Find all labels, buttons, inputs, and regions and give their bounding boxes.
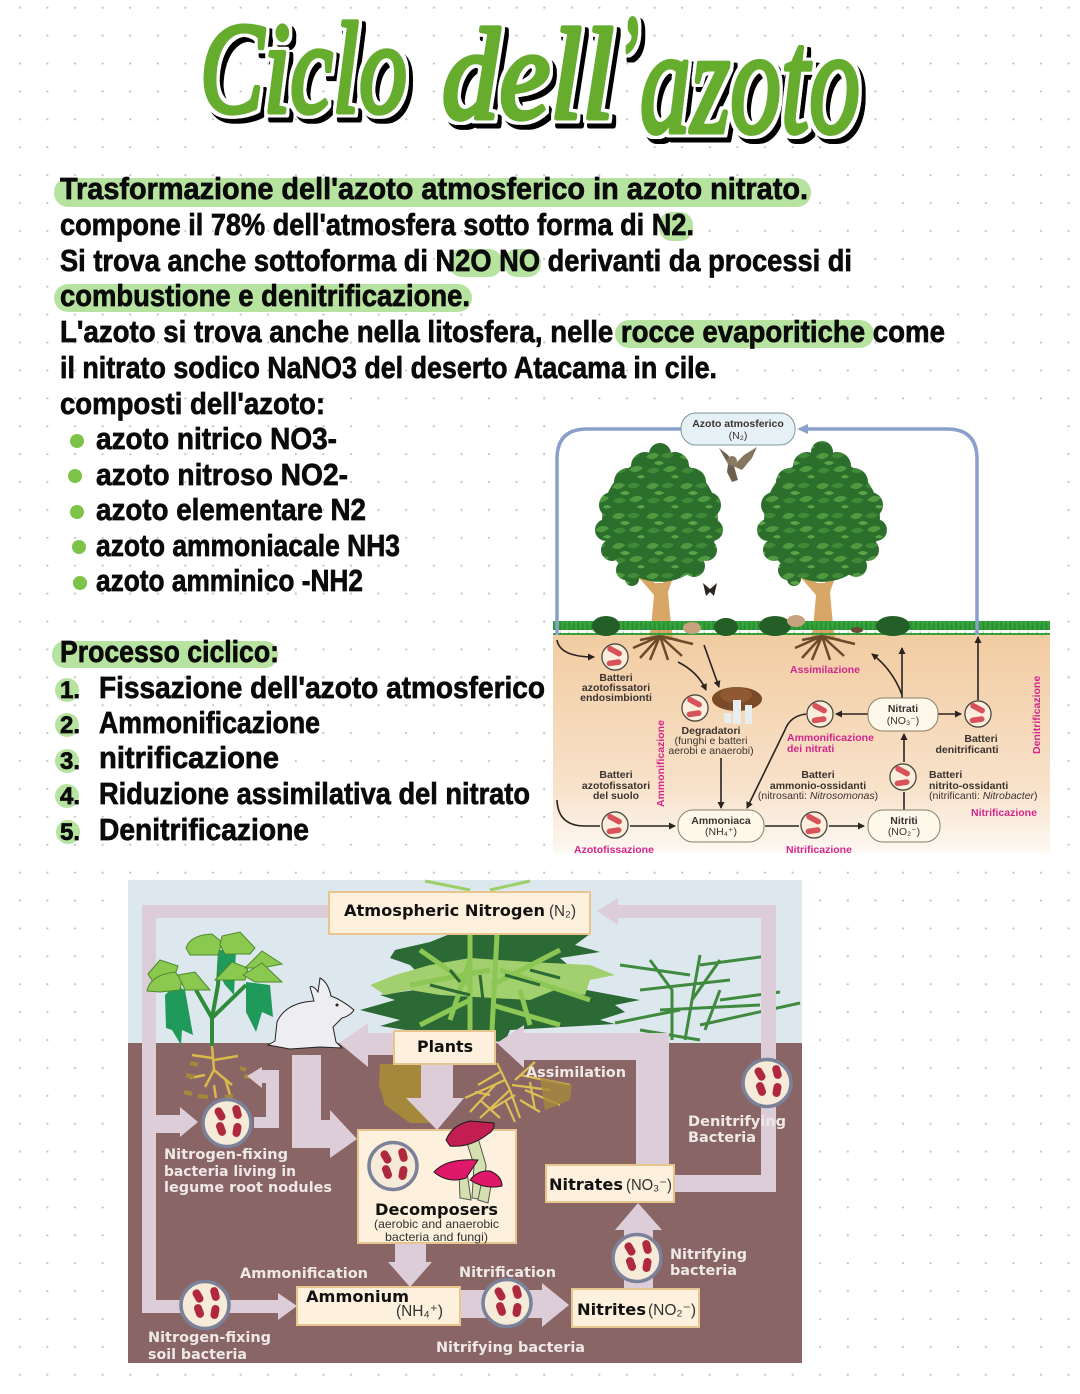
labels: aerobi e anaerobi) [668, 745, 754, 757]
butterfly [703, 583, 717, 596]
labels: Ammonificazione [655, 720, 667, 807]
labels: del suolo [593, 790, 639, 802]
box: atmospheric nitrogen [329, 892, 590, 934]
box: nitriti [868, 810, 940, 842]
labels: Azotofissazione [574, 844, 654, 856]
labels: dei nitrati [787, 743, 834, 755]
process labels: Nitrogen-fixing [148, 1330, 271, 1346]
cyclic process list: 3. [60, 748, 80, 775]
box: ammonium [297, 1287, 460, 1325]
title [200, 0, 860, 165]
cyclic process list: Ammonificazione [99, 705, 320, 740]
intro text block [54, 171, 945, 421]
box: nitrates [546, 1165, 674, 1202]
labels: azotofissatori [582, 780, 650, 792]
cyclic process list: 1. [60, 677, 80, 704]
cyclic process list: Denitrificazione [99, 812, 309, 847]
labels: (nitrificanti: Nitrobacter) [929, 790, 1038, 802]
flow arrows [142, 898, 776, 1327]
compounds bullet list [68, 421, 400, 598]
box: nitrati [868, 698, 938, 731]
labels: Batteri [599, 672, 633, 684]
labels: ammonio-ossidanti [770, 780, 866, 792]
box: atmospheric nitrogen: (N₂) [729, 430, 747, 442]
icon: mushrooms [434, 1121, 502, 1203]
rabbit [268, 978, 354, 1049]
box: ammoniaca: (NH₄⁺) [705, 826, 737, 838]
box: plants: Plants [417, 1037, 473, 1056]
title: azoto [640, 0, 860, 165]
box: decomposers [358, 1121, 516, 1244]
labels [574, 664, 1043, 856]
owl [719, 447, 757, 482]
box: decomposers: Decomposers [375, 1200, 498, 1219]
right plant [615, 955, 800, 1040]
bacteria circles [602, 644, 991, 838]
process labels: Nitrifying [670, 1247, 747, 1263]
legume plant [147, 932, 282, 1046]
cyclic process list: 2. [60, 712, 80, 739]
definition line 4: combustione e denitrificazione. [60, 278, 470, 313]
process labels [148, 1065, 786, 1363]
soil [128, 1043, 802, 1363]
definition line 2: compone il 78% dell'atmosfera sotto forma di N2. [60, 207, 694, 242]
labels: Ammonificazione [787, 732, 874, 744]
labels: azotofissatori [582, 682, 650, 694]
definition line 6: il nitrato sodico NaNO3 del deserto Atacama in cile. [60, 350, 717, 385]
process labels: Nitrification [459, 1265, 556, 1281]
labels: Denitrificazione [1031, 676, 1043, 754]
cyclic process list: nitrificazione [99, 740, 279, 775]
process labels: legume root nodules [164, 1180, 332, 1196]
labels: nitrito-ossidanti [929, 780, 1008, 792]
labels: Batteri [599, 769, 633, 781]
cyclic process list: Processo ciclico: [60, 634, 279, 669]
compounds bullet list: azoto amminico -NH2 [96, 563, 363, 598]
mushrooms [712, 687, 762, 724]
box: nitrati: (NO₃⁻) [887, 715, 919, 727]
compounds bullet list: azoto ammoniacale NH3 [96, 528, 400, 563]
definition line 5: L'azoto si trova anche nella litosfera, nelle rocce evaporitiche come [60, 314, 945, 349]
box: decomposers: (aerobic and anaerobic [374, 1217, 499, 1231]
box: nitrati: Nitrati [888, 703, 918, 715]
labels: Degradatori [682, 725, 741, 737]
tree right [757, 441, 887, 660]
box: atmospheric nitrogen: (N₂) [549, 903, 576, 920]
labels: Assimilazione [790, 664, 860, 676]
definition line 1: Trasformazione dell'azoto atmosferico in azoto nitrato. [60, 171, 808, 206]
process labels: Ammonification [240, 1266, 368, 1282]
title: Ciclo [200, 0, 407, 141]
labels: Batteri [929, 769, 962, 781]
labels: Batteri [964, 733, 998, 745]
box: nitrates: (NO₃⁻) [626, 1177, 672, 1194]
tree left [595, 443, 723, 660]
process labels: Nitrifying bacteria [436, 1340, 585, 1356]
box: atmospheric nitrogen [681, 413, 795, 445]
labels: (nitrosanti: Nitrosomonas) [758, 790, 878, 802]
labels: denitrificanti [935, 744, 999, 756]
cyclic process list [52, 634, 545, 847]
box: nitriti: (NO₂⁻) [888, 826, 920, 838]
box: ammonium: Ammonium [306, 1287, 409, 1306]
process labels: Denitrifying [688, 1114, 786, 1130]
compounds bullet list: azoto nitroso NO2- [96, 457, 348, 492]
bacteria circles [181, 1060, 791, 1328]
compounds bullet list: azoto elementare N2 [96, 492, 366, 527]
title: dell [442, 3, 614, 147]
process labels: Assimilation [526, 1065, 626, 1081]
cyclic process list: 4. [60, 783, 80, 810]
box: ammoniaca [678, 810, 764, 842]
grass band [553, 621, 1050, 635]
labels: endosimbionti [580, 692, 652, 704]
box: nitrates: Nitrates [549, 1175, 623, 1194]
process labels: Nitrogen-fixing [164, 1147, 288, 1163]
roots [184, 1046, 572, 1123]
box: nitriti: Nitriti [890, 815, 918, 827]
labels: Batteri [801, 769, 835, 781]
highlights [54, 178, 874, 348]
sky [128, 880, 802, 1045]
diagram: Italian nitrogen cycle [553, 408, 1050, 856]
small plants and animals [592, 615, 910, 636]
process labels: Bacteria [688, 1130, 756, 1146]
atmospheric loop [557, 429, 977, 635]
process labels: bacteria [670, 1263, 737, 1279]
labels: Nitrificazione [971, 807, 1037, 819]
diagram: English nitrogen cycle [128, 880, 802, 1363]
labels: (funghi e batteri [675, 735, 747, 747]
central plant [360, 881, 640, 1042]
box: nitrites: (NO₂⁻) [648, 1302, 696, 1319]
compounds heading: composti dell'azoto: [60, 386, 325, 421]
definition line 3: Si trova anche sottoforma di N2O NO derivanti da processi di [60, 243, 852, 278]
box: ammoniaca: Ammoniaca [691, 815, 751, 827]
box: ammonium: (NH₄⁺) [396, 1303, 443, 1320]
cyclic process list: Fissazione dell'azoto atmosferico [99, 670, 545, 705]
compounds bullet list: azoto nitrico NO3- [96, 421, 337, 456]
cyclic process list: 5. [60, 819, 80, 846]
box: atmospheric nitrogen: Atmospheric Nitrogen [344, 901, 545, 920]
box: atmospheric nitrogen: Azoto atmosferico [692, 418, 784, 430]
labels: Nitrificazione [786, 844, 852, 856]
process labels: bacteria living in [164, 1164, 296, 1180]
process arrows [557, 637, 978, 826]
soil [553, 635, 1050, 853]
box: nitrites [572, 1289, 699, 1327]
process labels: soil bacteria [148, 1347, 247, 1363]
box: decomposers: bacteria and fungi) [385, 1230, 488, 1244]
cyclic process list: Riduzione assimilativa del nitrato [99, 776, 530, 811]
box: plants [394, 1031, 495, 1064]
box: nitrites: Nitrites [577, 1300, 646, 1319]
